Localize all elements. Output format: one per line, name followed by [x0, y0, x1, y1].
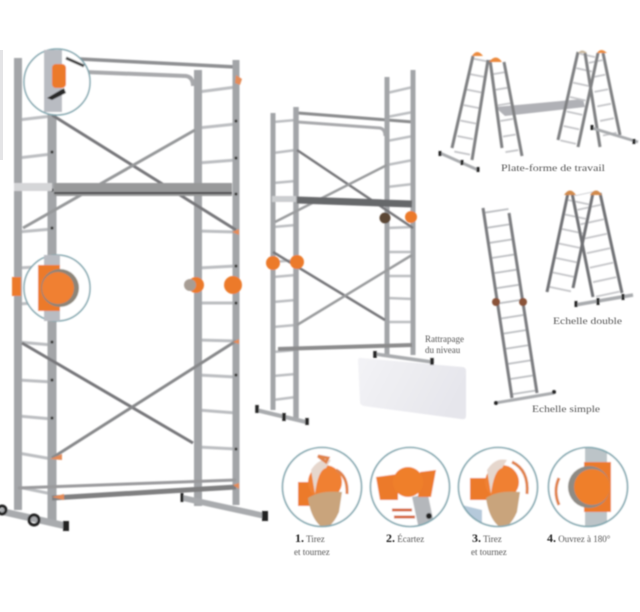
upper platform	[14, 183, 232, 196]
hinges	[266, 256, 280, 270]
caption: Rattrapage du niveau: du niveau	[425, 345, 461, 355]
platform deck	[495, 99, 585, 116]
medium scaffold on block	[256, 70, 466, 425]
guard rails	[298, 113, 413, 122]
orange hinges	[12, 75, 242, 500]
white block	[358, 358, 466, 419]
feet	[256, 410, 306, 422]
feet	[440, 128, 638, 170]
detail circle: orange hinge	[24, 255, 90, 321]
ladder posts	[18, 50, 236, 525]
left edge sliver	[0, 50, 3, 160]
left ladder pair	[452, 56, 522, 160]
step 3 label: et tournez	[471, 547, 507, 557]
posts	[273, 70, 413, 418]
guard rails	[80, 59, 236, 86]
ladder: double	[547, 190, 633, 307]
caption: Plate-forme de travail: Plate-forme de travail	[501, 163, 606, 173]
step 2 circle: spread apart	[370, 448, 450, 528]
post holes	[52, 121, 236, 449]
large scaffold tower	[0, 49, 265, 531]
step 4 circle: open 180 degrees	[548, 448, 628, 526]
step 1 label: 1. Tirez	[295, 531, 325, 545]
lower platform	[18, 480, 236, 498]
rungs	[273, 87, 413, 400]
step 4 label: 4. Ouvrez à 180°	[547, 531, 611, 545]
step 1 circle: pull and turn	[282, 448, 362, 528]
orange caps	[472, 50, 607, 62]
ladders: work platform	[440, 50, 638, 172]
step 3 circle: pull and turn	[458, 448, 538, 528]
detail circle: top hook	[24, 49, 90, 115]
caption: Echelle simple: Echelle simple	[532, 404, 600, 414]
caption: Rattrapage du niveau: Rattrapage	[425, 334, 464, 344]
braces	[273, 150, 413, 325]
feet	[0, 493, 265, 531]
caption: Echelle double: Echelle double	[553, 316, 622, 326]
platforms	[272, 196, 296, 202]
step 3 label: 3. Tirez	[472, 531, 502, 545]
diagonal braces	[22, 115, 236, 458]
ladder: single	[483, 208, 556, 405]
step 2 label: 2. Écartez	[386, 531, 424, 545]
ladder rungs	[18, 87, 236, 494]
right ladder pair	[558, 52, 620, 147]
step 1 label: et tournez	[294, 547, 330, 557]
